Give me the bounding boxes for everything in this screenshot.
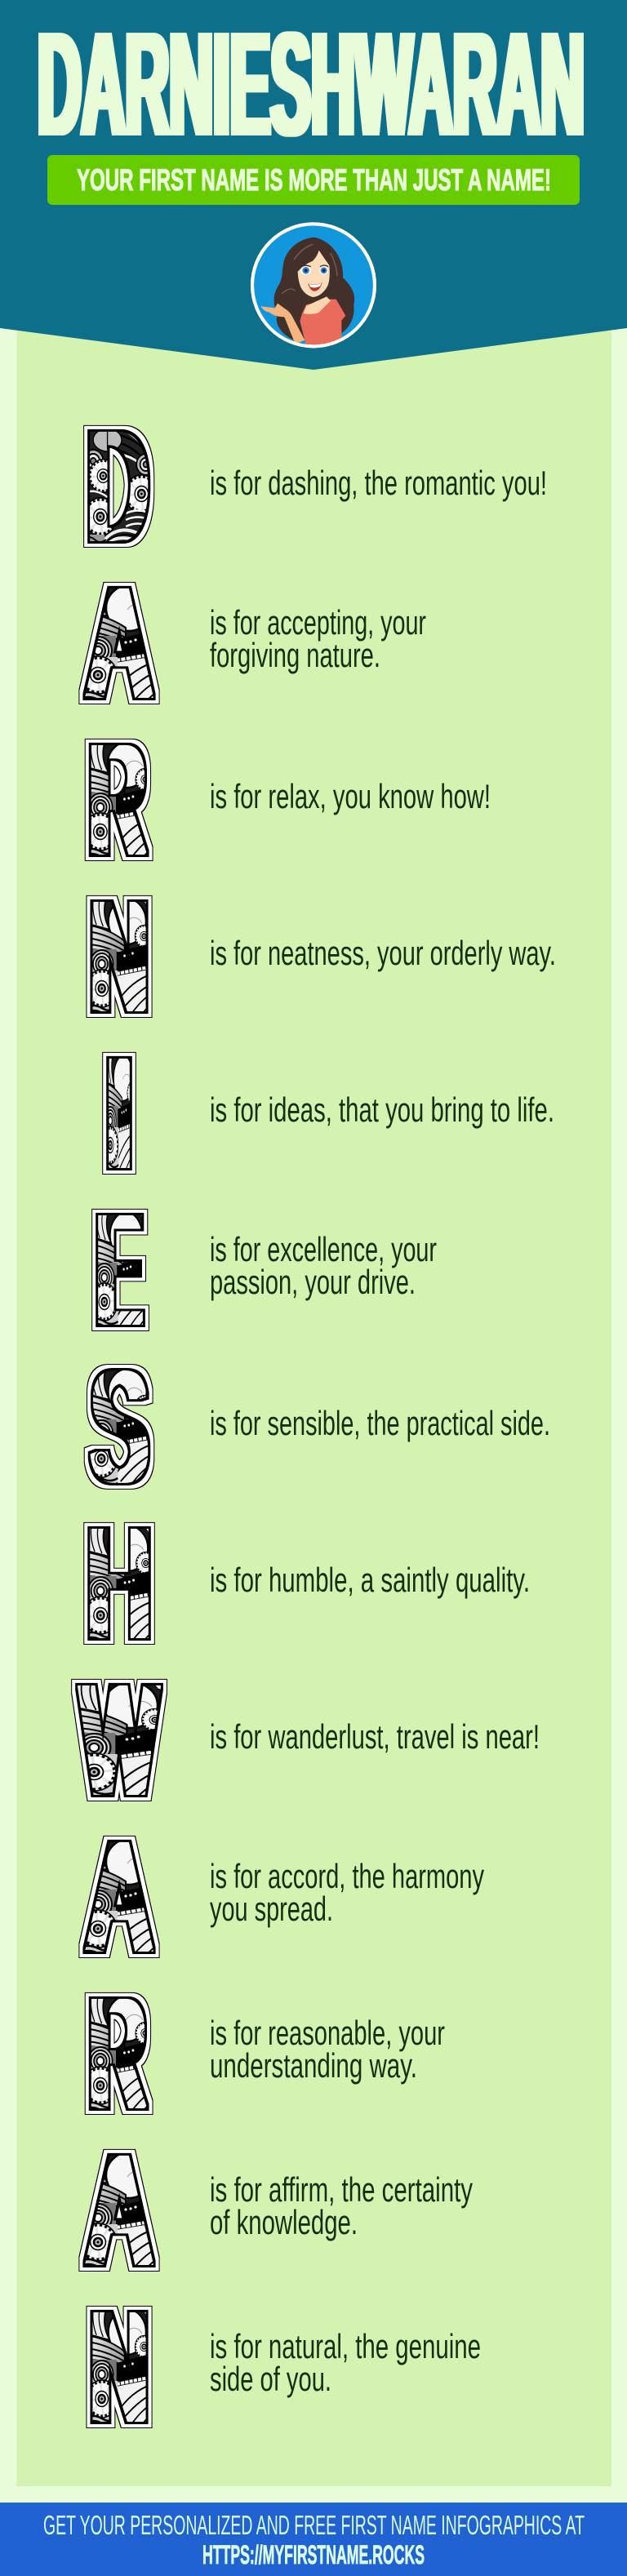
letter H row [80,1495,530,1671]
letter R: R [90,713,145,888]
letter S: S [91,1339,147,1514]
description R: is for reasonable, your [210,2014,445,2052]
description A: forgiving nature. [210,636,380,674]
letter I: I [103,1027,136,1201]
footer [0,2503,627,2576]
letter A: A [90,1809,149,1984]
letter R pattern [91,744,147,855]
letter E row [88,1183,437,1358]
counter fill [113,2175,126,2226]
letter A row 3 [74,2122,473,2298]
letter E: E [98,1183,140,1358]
counter fill [104,2011,129,2047]
description A [210,603,426,674]
letter D pattern [90,431,149,541]
letter R: R [90,1966,145,2142]
description E: is for excellence, your [210,1230,437,1268]
letter W: W [82,1654,156,1828]
letter N row [87,895,554,1018]
footer url: HTTPS://MYFIRSTNAME.ROCKS [202,2540,425,2569]
letter A pattern [85,588,153,698]
letter H pattern [80,1518,158,1649]
letter A row [78,581,426,704]
letter I row [102,1051,552,1175]
letter E pattern [88,1205,150,1335]
letter N pattern [93,901,146,1011]
description E [210,1230,437,1301]
letter W pattern [66,1675,172,1805]
letter R row 2 [80,1966,445,2142]
letter S row [82,1339,550,1514]
description R [210,2014,445,2085]
letter N pattern [82,2302,156,2432]
letter N: N [91,870,147,1045]
description A: of knowledge. [210,2203,358,2241]
letter D row [83,424,545,548]
avatar: woman in blue circle [252,224,375,346]
description A [210,1857,484,1928]
letter N row 2 [82,2281,481,2455]
letter A pattern [74,1832,164,1962]
letter H: H [88,1495,150,1671]
description A: is for accord, the harmony [210,1857,484,1895]
letter A pattern [74,2145,164,2276]
letter N: N [91,2281,147,2455]
letter W row [66,1654,540,1828]
letter D: D [88,399,147,574]
description E: passion, your drive. [210,1263,416,1301]
counter fill [104,757,129,793]
header banner [0,0,627,370]
letter A: A [90,555,149,731]
letter I pattern [109,1058,130,1168]
counter fill [113,608,126,659]
letter A row 2 [74,1809,484,1984]
description A: is for affirm, the certainty [210,2170,473,2209]
description A: you spread. [210,1890,333,1928]
letter R row [85,738,488,861]
description A: is for accepting, your [210,603,426,642]
counter fill [113,1862,126,1912]
letter S pattern [82,1361,157,1492]
description N: side of you. [210,2360,331,2398]
description N: is for natural, the genuine [210,2327,481,2365]
letter A: A [90,2122,149,2298]
description N [210,2327,481,2398]
description A [210,2170,473,2241]
letter R pattern [80,1988,158,2119]
subtitle ribbon [47,155,580,205]
description R: is for relax, you know how! [210,777,491,815]
description R: understanding way. [210,2046,417,2085]
